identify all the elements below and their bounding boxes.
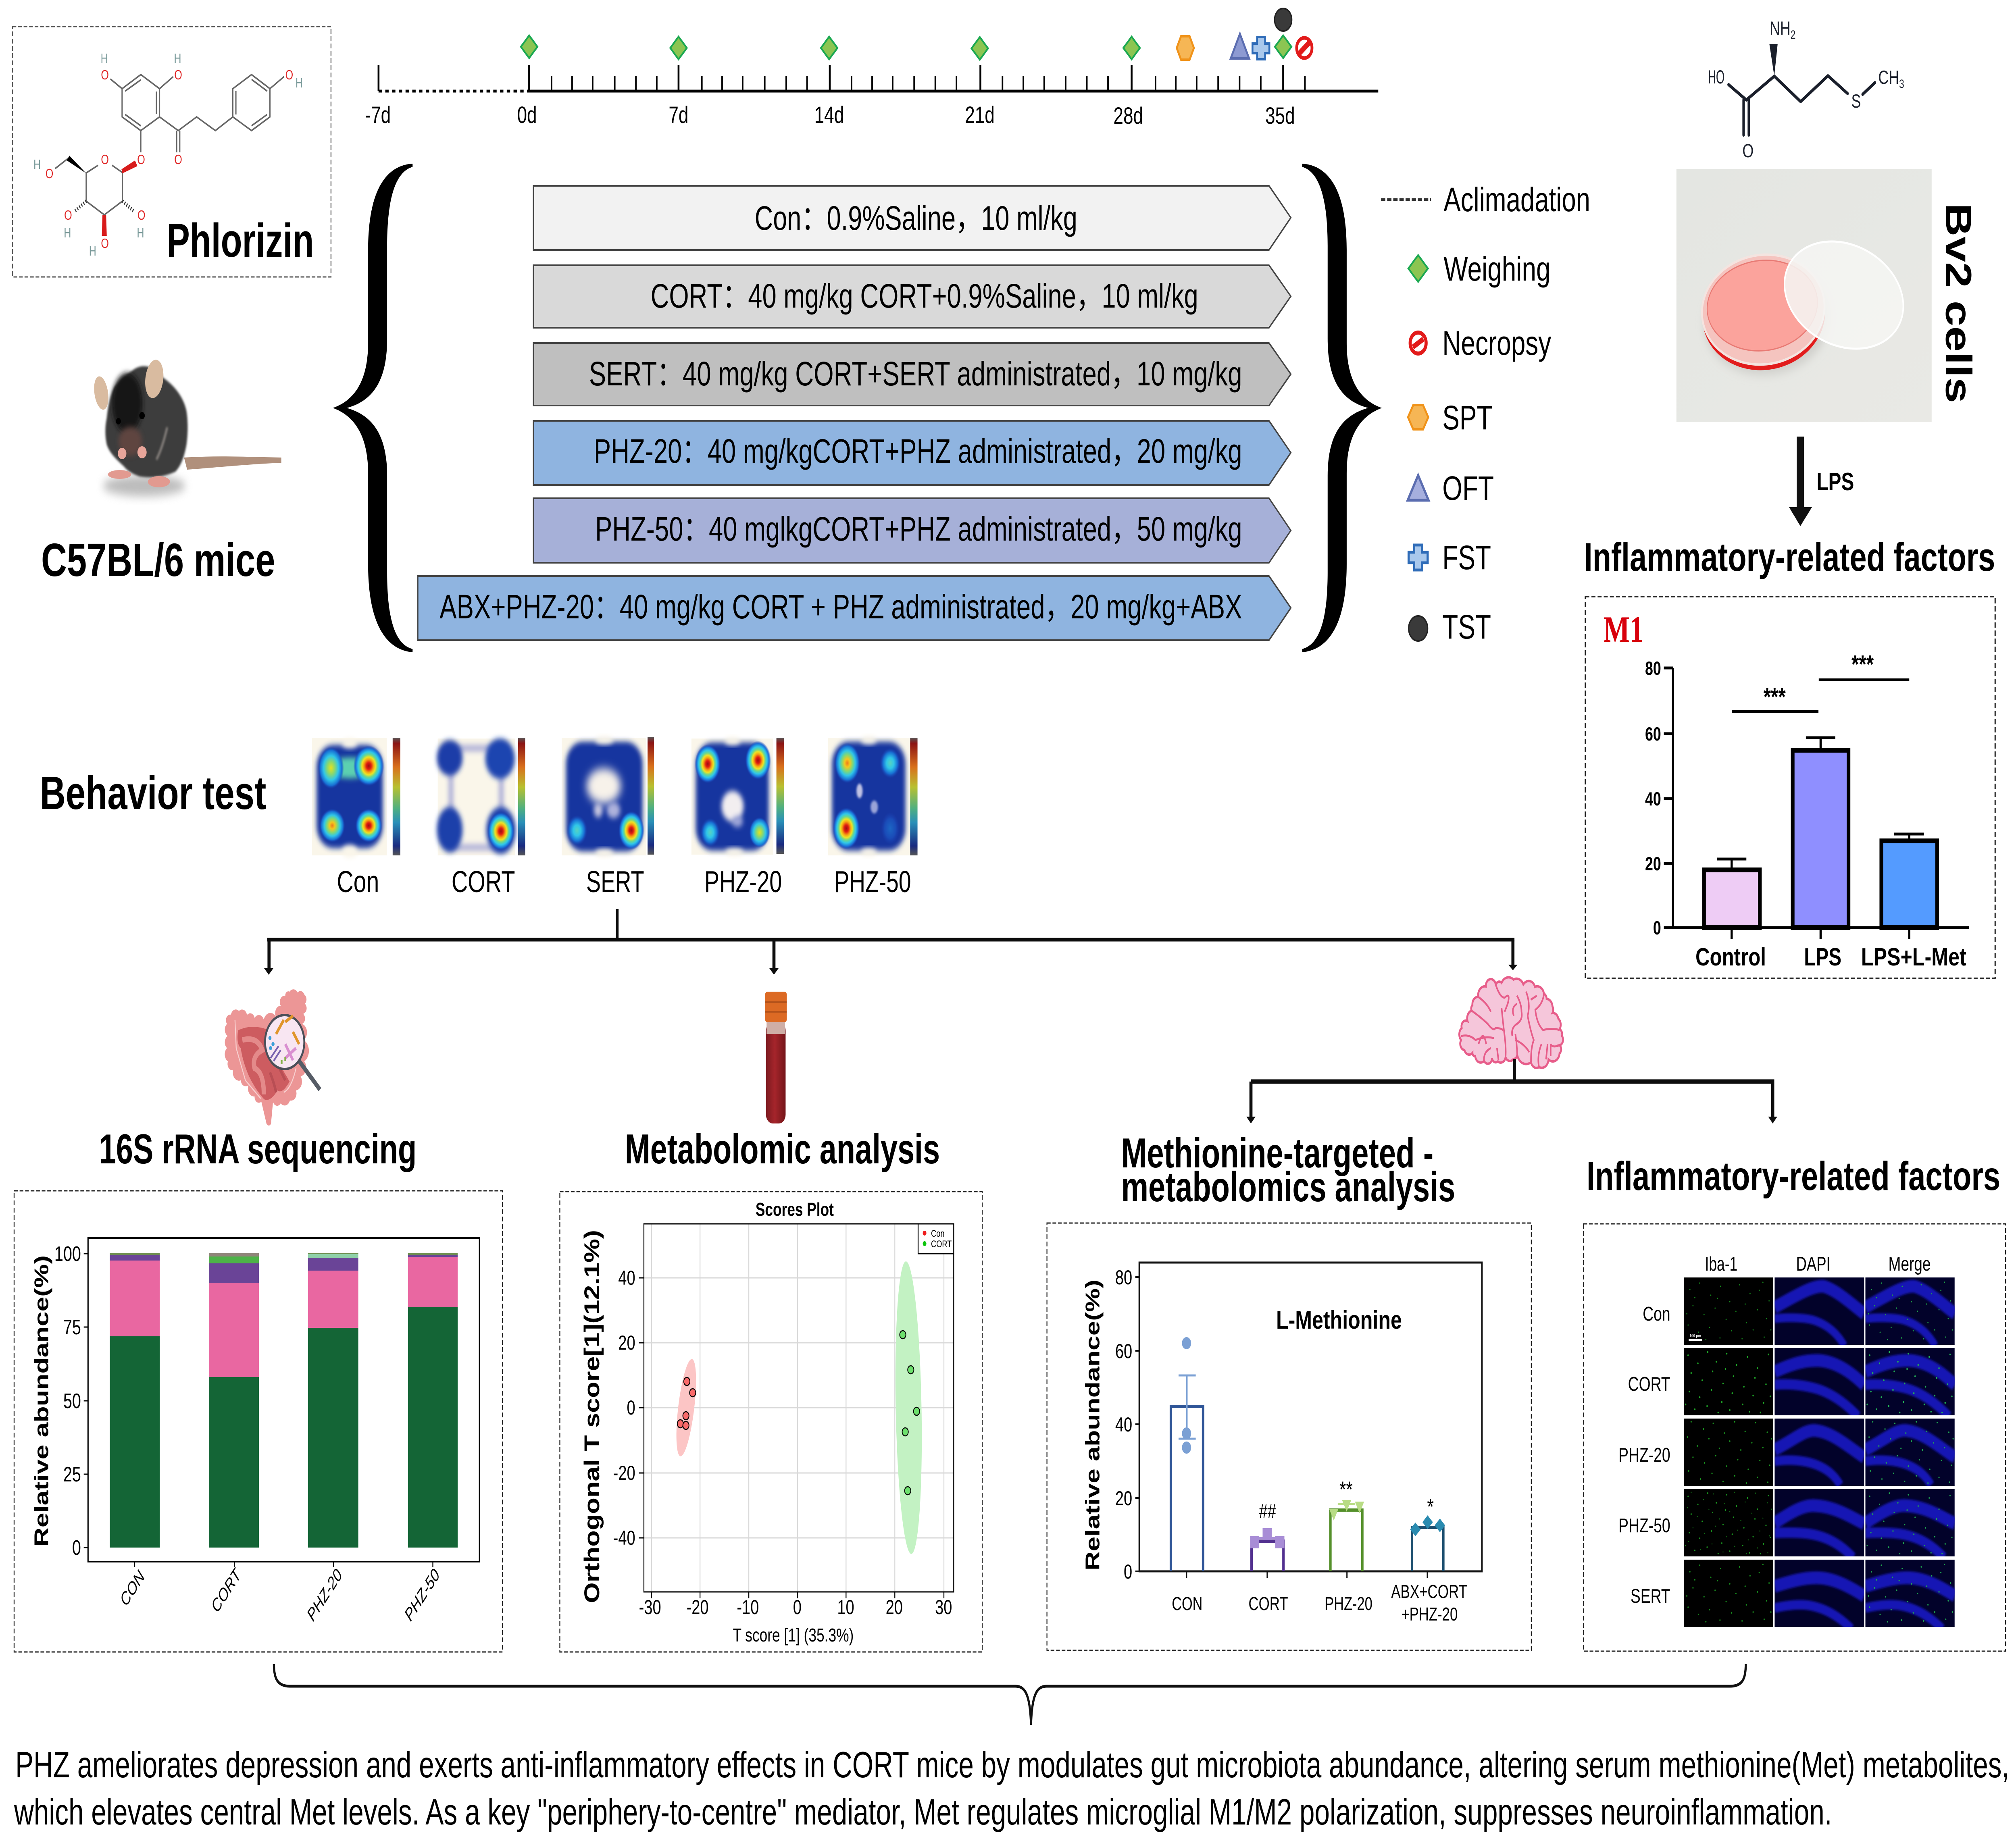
scores y title: Orthogonal T score[1](12.1%) — [580, 1230, 604, 1603]
panel: 16S stacked bar chart — [14, 1191, 502, 1652]
panel: immunofluorescence grid — [1583, 1224, 2006, 1651]
legend: TST: TST — [1442, 607, 1491, 646]
methionine atom labels: O — [1742, 140, 1754, 161]
legend: Weighing: Weighing — [1443, 250, 1551, 288]
icon: blood tube — [765, 992, 787, 1123]
heading: Methionine-targeted metabolomics analysis: metabolomics analysis — [1121, 1163, 1455, 1211]
heading: Inflammatory-related factors (top): Inflammatory-related factors — [1584, 535, 1995, 579]
timeline — [365, 8, 1378, 129]
L-Met x labels — [1172, 1581, 1467, 1625]
M1 significance: *** — [1851, 650, 1874, 678]
bottom bracket — [274, 1664, 1746, 1725]
molecule: atom labels — [33, 51, 303, 259]
arrow to methionine analysis — [1246, 1082, 1256, 1123]
heading: Methionine-targeted metabolomics analysis — [1121, 1129, 1455, 1211]
heatmap labels: Con — [337, 865, 379, 899]
M1 axis labels — [1645, 657, 1661, 938]
timeline day labels — [365, 102, 1295, 129]
cluster: CORT ellipse — [893, 1261, 924, 1554]
bar: PHZ-50 — [408, 1253, 458, 1548]
L-Met y labels: 60 — [1115, 1340, 1132, 1363]
row: SERT — [1684, 1560, 1955, 1629]
scores x labels: 10 — [837, 1596, 854, 1618]
scores y labels: 0 — [627, 1397, 635, 1419]
16S x axis labels: PHZ-50 — [402, 1565, 443, 1625]
heatmap: PHZ-20 — [691, 737, 784, 856]
timeline day labels: 7d — [669, 102, 688, 128]
scores x labels — [639, 1596, 952, 1618]
bar: PHZ-20 — [308, 1253, 358, 1548]
row: CORT — [1684, 1348, 1955, 1417]
row labels: CORT — [1628, 1373, 1670, 1395]
L-Met y labels: 40 — [1115, 1414, 1132, 1436]
row labels: PHZ-20 — [1618, 1444, 1670, 1466]
arrows: brain to sub-analyses — [1246, 1059, 1777, 1123]
scores legend: Con — [931, 1228, 945, 1239]
M1 axis labels: 60 — [1645, 723, 1661, 745]
16S y axis labels: 0 — [72, 1536, 81, 1559]
panel: treatment groups — [418, 186, 1291, 640]
heatmap labels: PHZ-20 — [704, 865, 782, 899]
heatmap: PHZ-50 — [828, 736, 918, 856]
bar: CON — [1171, 1337, 1203, 1571]
bar: ABX+CORT+PHZ-20 — [1410, 1515, 1445, 1571]
timeline day labels: 0d — [517, 102, 537, 128]
L-Met x labels: ABX+CORT — [1391, 1581, 1467, 1602]
row labels: PHZ-50 — [1618, 1515, 1670, 1537]
L-Met x labels: PHZ-20 — [1325, 1593, 1372, 1614]
column headers: Merge — [1889, 1253, 1931, 1275]
heading: Phlorizin: Phlorizin — [167, 214, 314, 267]
timeline FST marker — [1252, 37, 1269, 59]
scores plot title: Scores Plot — [756, 1199, 834, 1220]
methionine atom labels: 3 — [1899, 77, 1904, 91]
row: PHZ-20 — [1684, 1419, 1955, 1486]
row labels: Con — [1643, 1303, 1670, 1325]
M1 significance — [1732, 650, 1909, 711]
methionine atom labels: 2 — [1791, 28, 1795, 42]
panel: M1 bar chart — [1585, 597, 1995, 978]
molecule: atom labels: H — [64, 226, 71, 241]
icon: brain — [1459, 977, 1563, 1068]
timeline TST marker — [1275, 8, 1292, 31]
row: PHZ-50 — [1684, 1489, 1955, 1558]
timeline day labels: -7d — [365, 102, 391, 128]
scores x title: T score [1] (35.3%) — [733, 1625, 854, 1646]
timeline day labels: 14d — [814, 102, 844, 128]
icon: gut with magnifier — [225, 989, 320, 1125]
L-Met y title: Relative abundance(%) — [1082, 1279, 1104, 1571]
arrow: LPS: LPS — [1816, 468, 1854, 496]
molecule: stereo wedges — [67, 156, 137, 236]
panel: L-Methionine bar chart — [1047, 1223, 1531, 1650]
molecule: atom labels: O — [174, 152, 182, 167]
row: Con — [1684, 1277, 1955, 1346]
scores x labels: -20 — [687, 1596, 709, 1618]
M1 category labels: LPS — [1804, 943, 1841, 971]
molecule: atom labels: O — [101, 152, 109, 167]
legend: Aclimadation: Aclimadation — [1443, 180, 1590, 218]
scores y labels: 20 — [618, 1332, 635, 1354]
heatmap labels: CORT — [452, 865, 515, 899]
M1 bars — [1704, 750, 1937, 928]
molecule: atom labels: O — [101, 236, 109, 251]
timeline day labels: 21d — [965, 102, 995, 128]
heading: Behavior test: Behavior test — [40, 767, 266, 819]
panel: OPLS-DA scores plot — [560, 1192, 982, 1652]
M1 axis labels: 40 — [1645, 788, 1661, 809]
significance marks: ** — [1339, 1477, 1353, 1502]
16S y axis labels: 25 — [63, 1462, 81, 1486]
16S x axis labels: CORT — [208, 1564, 245, 1616]
molecule: atom labels: H — [296, 76, 303, 91]
16S axis ticks — [84, 1254, 433, 1567]
heatmap: CORT — [437, 738, 525, 855]
legend: OFT: OFT — [1442, 469, 1494, 507]
arrows: behavior test to analyses — [264, 909, 1518, 975]
panel: phlorizin structure — [12, 27, 331, 277]
column headers — [1705, 1253, 1931, 1275]
arrow: LPS — [1789, 437, 1854, 526]
M1 category labels — [1695, 943, 1966, 971]
methionine atom labels — [1708, 17, 1904, 161]
scores y labels: -40 — [613, 1527, 635, 1549]
cluster: Con ellipse — [673, 1357, 700, 1458]
methionine atom labels: S — [1851, 90, 1861, 112]
axis and ticks — [379, 65, 1378, 91]
scores frame — [644, 1224, 954, 1592]
16S y axis labels: 75 — [63, 1315, 81, 1339]
significance marks: * — [1427, 1494, 1434, 1519]
timeline SPT marker — [1177, 36, 1194, 60]
heatmap labels: PHZ-50 — [834, 865, 911, 899]
group SERT: SERT：40 mg/kg CORT+SERT administrated，10 mg/kg — [589, 354, 1242, 393]
16S x axis labels — [117, 1564, 443, 1625]
methionine atom labels: NH — [1770, 17, 1791, 39]
molecule: atom labels: O — [137, 152, 145, 167]
heading: Methionine-targeted metabolomics analysis: Methionine-targeted - — [1121, 1129, 1433, 1177]
column headers: Iba-1 — [1705, 1253, 1737, 1275]
heatmap labels: SERT — [586, 865, 644, 899]
methionine bonds — [1729, 76, 1875, 135]
scale bar — [1689, 1333, 1702, 1341]
L-Met x labels: +PHZ-20 — [1401, 1604, 1458, 1625]
timeline day labels: 28d — [1113, 102, 1143, 129]
M1 label: M1 — [1604, 609, 1643, 650]
16S y axis title: Relative abundance(%) — [31, 1255, 53, 1547]
bar: CORT — [209, 1253, 259, 1548]
group ABX+PHZ-20: ABX+PHZ-20：40 mg/kg CORT + PHZ administrated，20 mg/kg+ABX — [439, 587, 1242, 626]
scale bar: 100 μm — [1690, 1333, 1701, 1338]
molecule: atom labels: O — [174, 68, 182, 83]
group PHZ-20 — [533, 421, 1291, 485]
M1 category labels: Control — [1695, 943, 1766, 971]
legend: Necropsy: Necropsy — [1442, 324, 1552, 362]
group SERT — [533, 343, 1291, 406]
M1 category labels: LPS+L-Met — [1861, 943, 1966, 971]
16S x axis labels: PHZ-20 — [304, 1565, 346, 1625]
molecule: atom labels: H — [101, 51, 108, 66]
L-Met x labels: CORT — [1248, 1593, 1288, 1614]
bar: CORT — [1250, 1528, 1284, 1571]
molecule: atom labels: O — [101, 68, 109, 83]
heatmap labels — [337, 865, 911, 899]
16S y axis labels: 100 — [54, 1242, 81, 1265]
scores legend — [918, 1224, 954, 1254]
left brace — [333, 164, 412, 652]
group PHZ-50: PHZ-50：40 mglkgCORT+PHZ administrated，50 mg/kg — [595, 510, 1242, 548]
arrow to gut — [264, 940, 273, 975]
L-Met y labels: 20 — [1115, 1487, 1132, 1510]
molecule: atom labels: H — [89, 244, 96, 259]
group Con: Con：0.9%Saline，10 ml/kg — [755, 199, 1077, 237]
L-Met y labels: 0 — [1124, 1561, 1132, 1583]
photo: Bv2 cell culture dish — [1677, 169, 1932, 422]
heatmap: SERT — [562, 736, 654, 857]
Con points — [677, 1377, 696, 1429]
methionine atom labels: HO — [1708, 66, 1724, 87]
legend: TST — [1409, 607, 1491, 646]
group CORT — [533, 265, 1291, 328]
row labels — [1618, 1303, 1670, 1607]
heading: C57BL/6 mice: C57BL/6 mice — [41, 534, 275, 586]
icon: mouse — [92, 358, 281, 496]
16S y axis labels: 50 — [63, 1389, 81, 1413]
CORT points — [900, 1331, 920, 1495]
heading: Bv2 cells: Bv2 cells — [1938, 203, 1979, 403]
molecule: phlorizin bonds — [55, 75, 284, 215]
M1 axis labels: 80 — [1645, 657, 1661, 679]
significance marks — [1259, 1477, 1434, 1523]
molecule: atom labels: H — [137, 226, 144, 241]
arrow to inflammatory factors — [1768, 1082, 1777, 1123]
molecule: atom labels: O — [285, 68, 293, 83]
group CORT: CORT：40 mg/kg CORT+0.9%Saline，10 ml/kg — [651, 277, 1198, 315]
L-Methionine title: L-Methionine — [1276, 1306, 1402, 1334]
conclusion text: which elevates central Met levels. As a key "periphery-to-centre" mediator, Met regulates microglial M1/M2 polarization, suppresses neuroinflammation. — [14, 1792, 1832, 1833]
heatmap: Con — [312, 738, 400, 858]
methionine wedge — [1769, 44, 1778, 76]
legend: FST: FST — [1442, 538, 1491, 576]
significance marks: ## — [1259, 1500, 1276, 1523]
molecule: atom labels: O — [137, 208, 145, 223]
M1 axes — [1664, 668, 1969, 939]
legend: SPT — [1408, 398, 1493, 437]
timeline necropsy marker — [1297, 38, 1312, 58]
molecule: atom labels: O — [64, 208, 72, 223]
legend: FST — [1409, 538, 1491, 576]
molecule: methionine — [1708, 17, 1904, 161]
M1 axis labels: 20 — [1645, 853, 1661, 874]
L-Met x labels: CON — [1172, 1593, 1202, 1614]
bar: PHZ-20 — [1329, 1500, 1364, 1571]
column headers: DAPI — [1796, 1253, 1831, 1275]
timeline day labels: 35d — [1265, 102, 1295, 129]
legend: OFT — [1408, 469, 1494, 507]
arrow to brain — [1508, 940, 1518, 970]
row labels: SERT — [1631, 1585, 1670, 1607]
molecule: atom labels: O — [46, 166, 53, 181]
M1 axis labels: 0 — [1653, 917, 1661, 938]
heading: 16S rRNA sequencing: 16S rRNA sequencing — [99, 1125, 417, 1173]
timeline OFT marker — [1231, 34, 1249, 58]
molecule: atom labels: H — [174, 51, 181, 66]
legend: SPT: SPT — [1442, 398, 1493, 437]
L-Met y labels: 80 — [1115, 1267, 1132, 1289]
scores x labels: -30 — [639, 1596, 661, 1618]
16S x axis labels: CON — [117, 1567, 148, 1610]
right brace — [1302, 164, 1382, 652]
scores y labels: 40 — [618, 1267, 635, 1289]
scores y labels — [613, 1267, 635, 1549]
scores x labels: 0 — [793, 1596, 802, 1618]
L-Met axis ticks — [1135, 1277, 1427, 1578]
scores x labels: 20 — [886, 1596, 903, 1618]
scores axis ticks — [639, 1278, 944, 1598]
bar: CON — [110, 1253, 160, 1548]
scores x labels: 30 — [935, 1596, 952, 1618]
timeline weighing markers — [521, 35, 1291, 60]
group PHZ-20: PHZ-20：40 mg/kgCORT+PHZ administrated，20 mg/kg — [594, 432, 1242, 470]
scores legend: CORT — [931, 1239, 952, 1250]
arrow to blood tube — [769, 940, 779, 975]
heading: Inflammatory-related factors (bottom): Inflammatory-related factors — [1587, 1154, 2000, 1198]
conclusion text: PHZ ameliorates depression and exerts anti-inflammatory effects in CORT mice by modulates gut microbiota abundance, altering serum methionine(Met) metabolites, — [15, 1745, 2009, 1785]
heading: Metabolomic analysis: Metabolomic analysis — [625, 1125, 940, 1173]
scores y labels: -20 — [613, 1462, 635, 1484]
group PHZ-50 — [533, 498, 1291, 563]
methionine atom labels: CH — [1878, 67, 1899, 88]
scores gridlines — [644, 1224, 954, 1592]
M1 significance: *** — [1764, 683, 1786, 711]
L-Met y labels — [1115, 1267, 1132, 1583]
16S y axis labels — [54, 1242, 81, 1559]
scores x labels: -10 — [737, 1596, 759, 1618]
group Con — [533, 186, 1291, 250]
conclusion text — [14, 1745, 2009, 1833]
M1 error bars — [1717, 738, 1924, 867]
molecule: atom labels: H — [33, 157, 41, 172]
legend — [1381, 180, 1590, 646]
group ABX+PHZ-20 — [418, 576, 1291, 640]
